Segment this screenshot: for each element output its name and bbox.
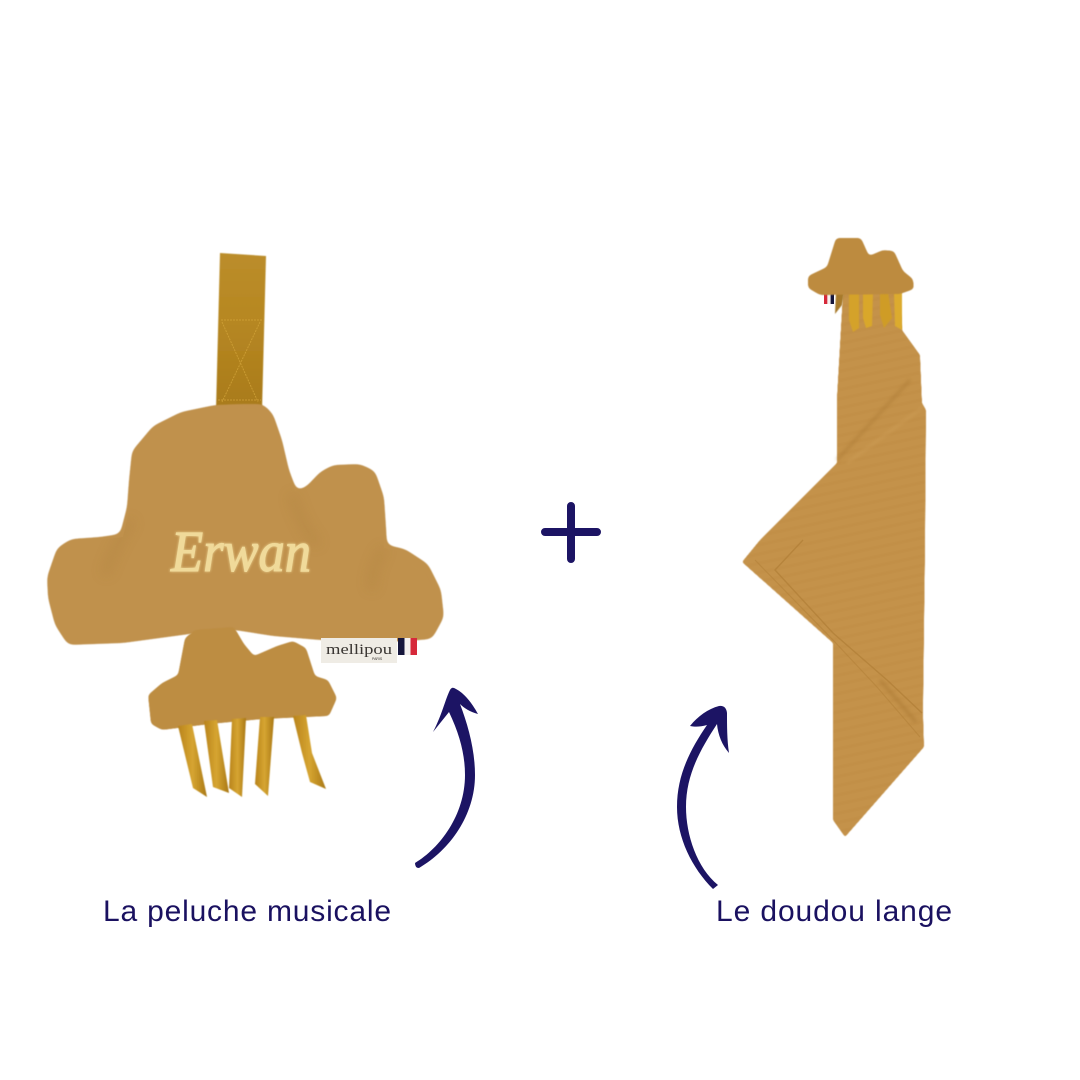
large cloud cushion [47,404,444,645]
name embroidery: Erwan: Erwan [170,519,311,584]
hanging strap [216,253,266,410]
brand label: mellipou: PARIS [372,657,383,661]
arrow to peluche [415,688,478,868]
brand label: mellipou [321,638,417,663]
arrow to doudou [677,706,729,889]
flag tag [824,293,834,304]
caption: la peluche musicale: La peluche musicale [103,895,391,928]
infographic canvas [46,237,951,927]
ribbons on cloth [835,292,902,332]
muslin cloth [742,292,926,837]
product: le doudou lange [742,238,926,837]
brand label: mellipou: mellipou [326,642,393,658]
mini cloud [808,238,914,295]
plus sign [545,506,597,559]
small cloud [148,627,337,730]
caption: le doudou lange: Le doudou lange [716,895,952,928]
five satin ribbons [178,715,326,797]
product: la peluche musicale [47,253,444,797]
